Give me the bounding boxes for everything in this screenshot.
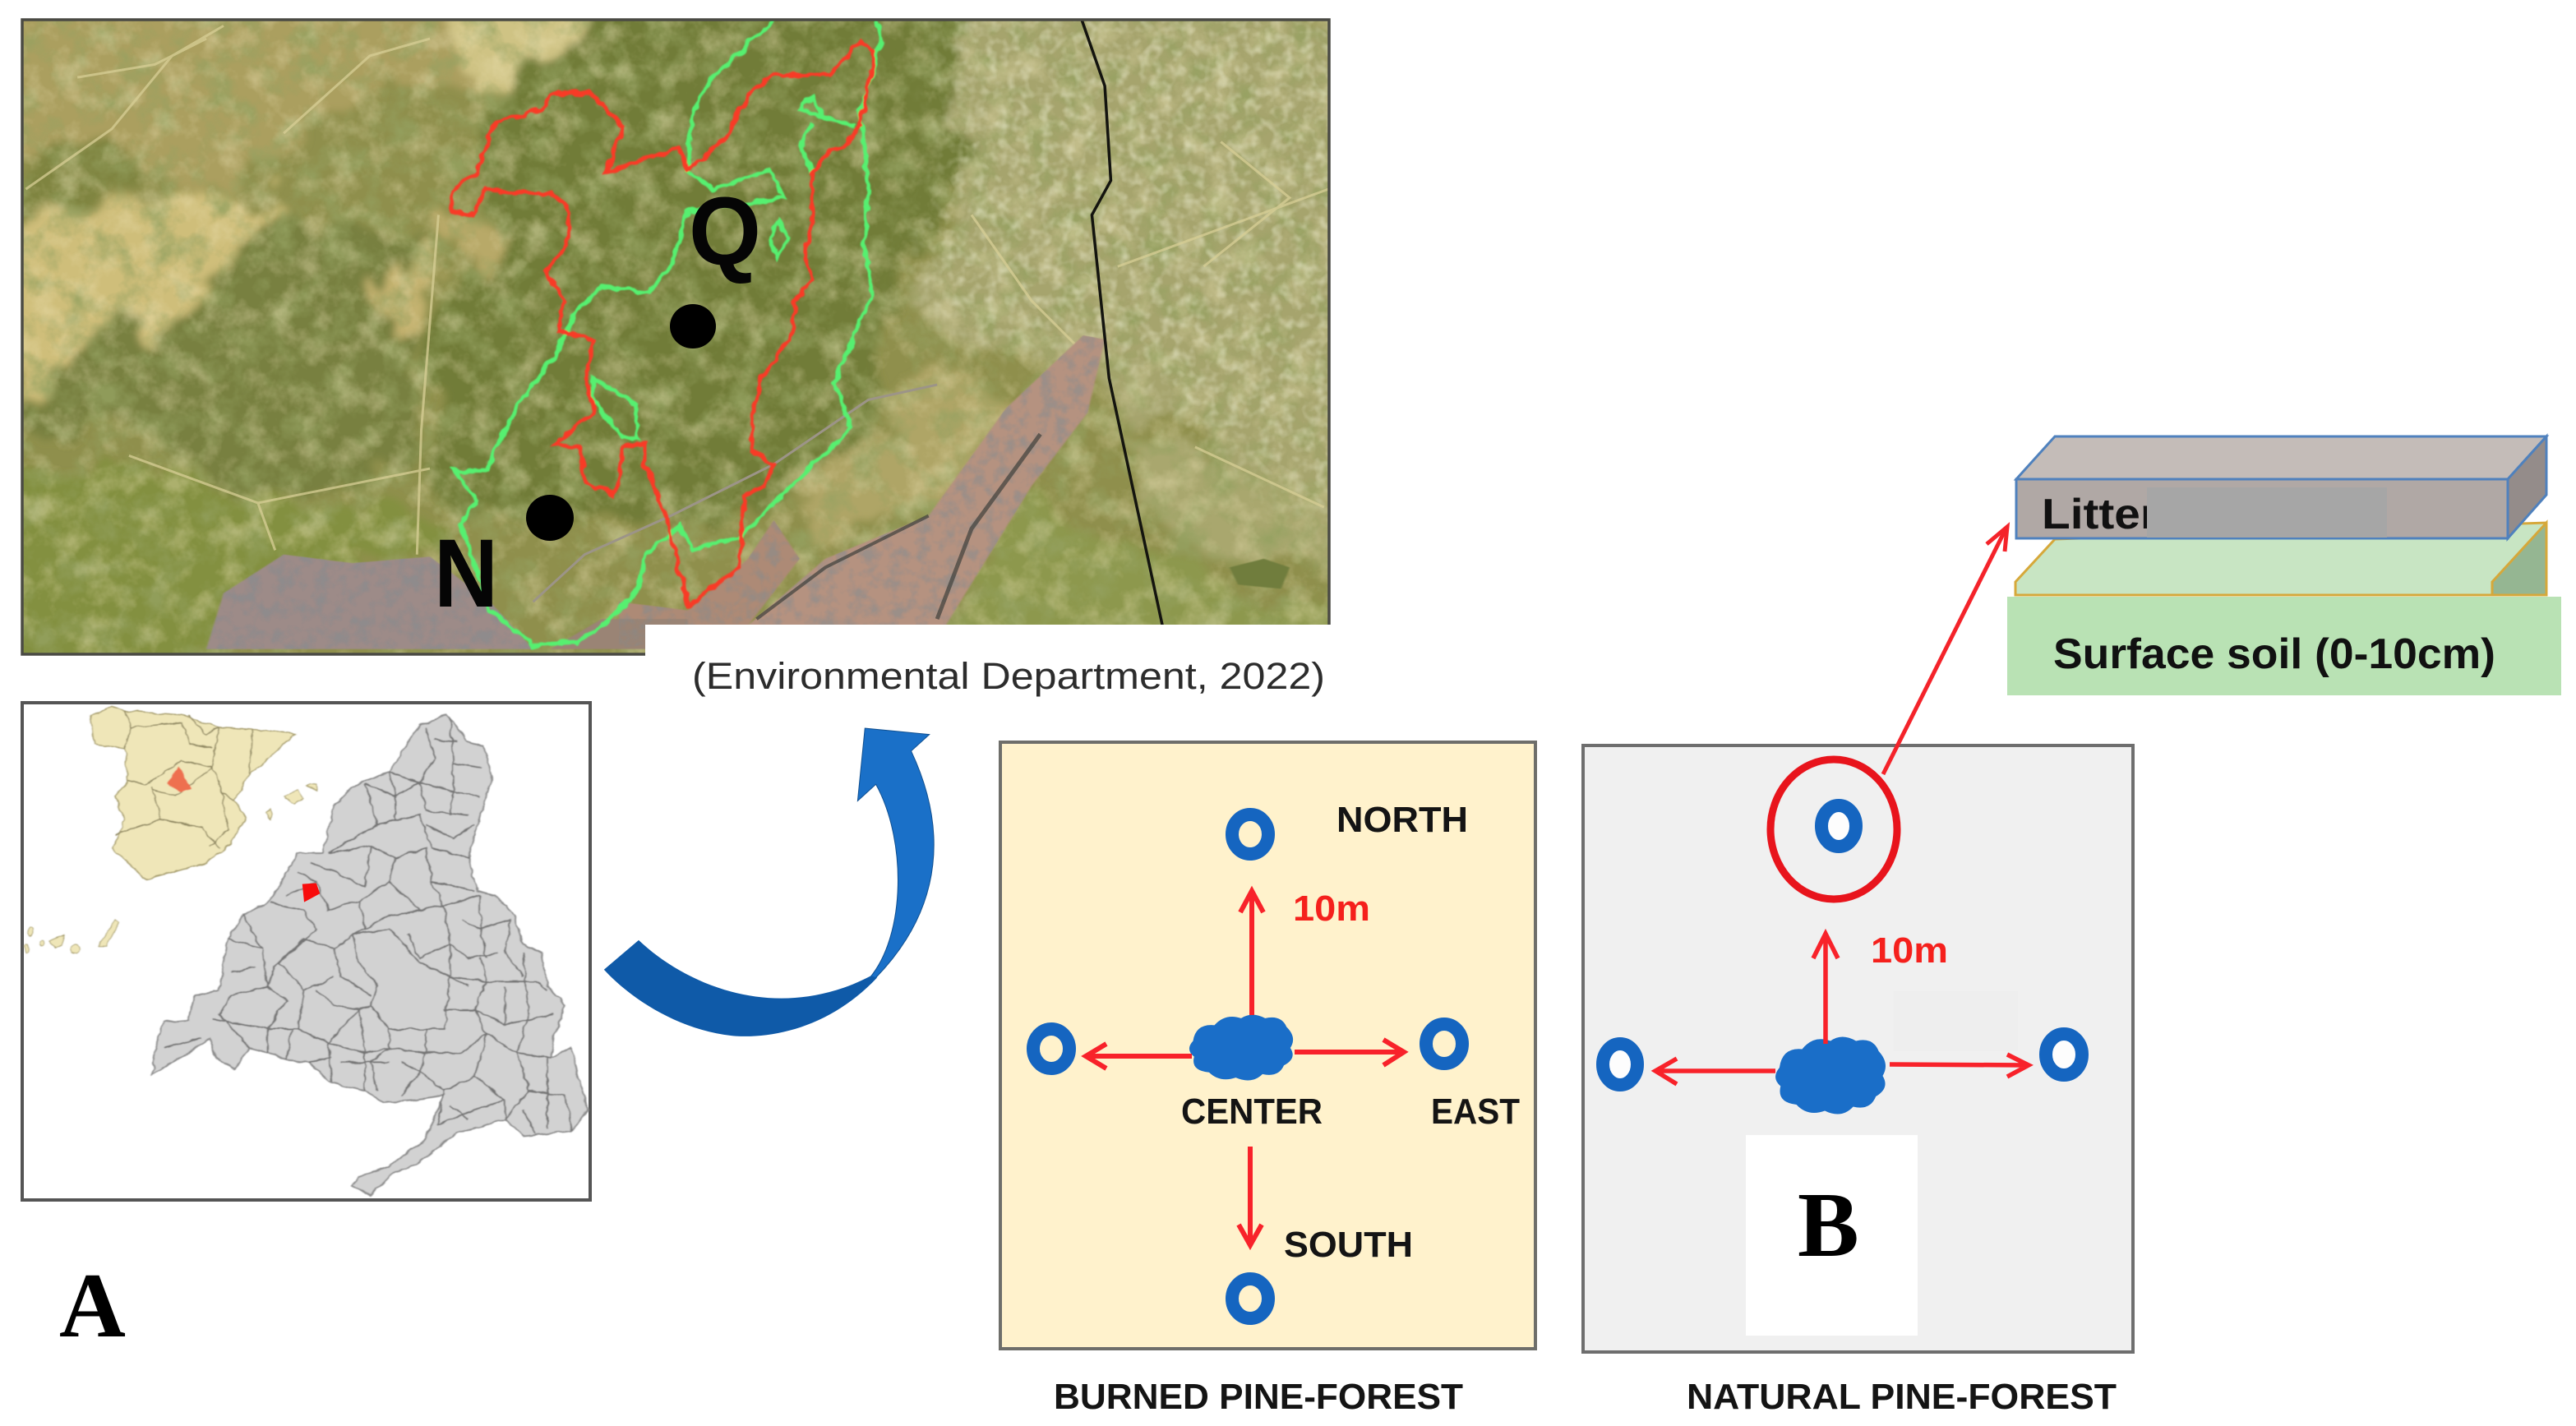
litter layer block xyxy=(2016,436,2546,538)
Balearic and Canary Islands xyxy=(25,784,317,953)
green perimeter xyxy=(455,20,881,645)
caption burned pine-forest: BURNED PINE-FOREST xyxy=(1054,1377,1463,1417)
panel: natural pine-forest sampling design xyxy=(1583,745,2133,1417)
label N: N xyxy=(434,519,498,628)
red selection circle xyxy=(1770,759,1897,899)
arrow from sampling point to soil layers xyxy=(1883,527,2007,774)
natural panel background xyxy=(1583,745,2133,1352)
panel: satellite map of the study area xyxy=(21,18,1331,656)
panel: locator maps of Spain and Madrid xyxy=(22,703,590,1200)
curved blue arrow from locator map to satellite map xyxy=(604,728,934,1036)
label CENTER: CENTER xyxy=(1181,1091,1323,1132)
faint patch xyxy=(1894,991,2018,1051)
panel: burned pine-forest sampling design xyxy=(1000,742,1535,1417)
satellite image background xyxy=(23,21,1328,653)
label Q: Q xyxy=(689,178,761,286)
surface soil front xyxy=(2007,597,2561,695)
red burned area perimeter xyxy=(451,41,875,606)
study site in red xyxy=(302,883,320,902)
red distance arrows xyxy=(1086,891,1404,1245)
Madrid municipalities map xyxy=(152,714,587,1195)
burned panel background xyxy=(1000,742,1535,1349)
Madrid region highlighted in Spain xyxy=(167,767,192,792)
label NORTH: NORTH xyxy=(1336,800,1468,840)
surface soil block side xyxy=(2492,523,2546,595)
center cloud symbol xyxy=(1189,1015,1293,1081)
Spain inset map xyxy=(25,706,317,953)
surface soil label: Surface soil (0-10cm) xyxy=(2053,630,2495,678)
sampling point rings xyxy=(1603,805,2082,1085)
label EAST: EAST xyxy=(1431,1091,1520,1132)
sampling point rings xyxy=(1033,815,1462,1318)
soil layer diagram xyxy=(2007,436,2561,695)
surface soil block top xyxy=(2015,523,2546,595)
pale tracks and roads xyxy=(25,25,1328,555)
site marker Q xyxy=(670,304,716,348)
distance label 10m: 10m xyxy=(1871,930,1948,971)
panel label B: B xyxy=(1798,1174,1859,1276)
source caption box xyxy=(645,625,1344,715)
center cloud symbol xyxy=(1775,1037,1886,1114)
source caption: (Environmental Department, 2022) xyxy=(692,655,1325,697)
black boundary line xyxy=(1082,20,1162,625)
label SOUTH: SOUTH xyxy=(1284,1225,1413,1265)
site marker N xyxy=(526,495,574,541)
grey patch over label end xyxy=(2147,487,2387,538)
white box behind label B xyxy=(1746,1135,1918,1336)
red distance arrows xyxy=(1655,934,2029,1084)
distance label 10m: 10m xyxy=(1293,888,1370,929)
caption natural pine-forest: NATURAL PINE-FOREST xyxy=(1687,1377,2117,1417)
map frame xyxy=(22,20,1329,654)
panel label A: A xyxy=(59,1255,126,1357)
litter label: Litter xyxy=(2042,491,2158,538)
